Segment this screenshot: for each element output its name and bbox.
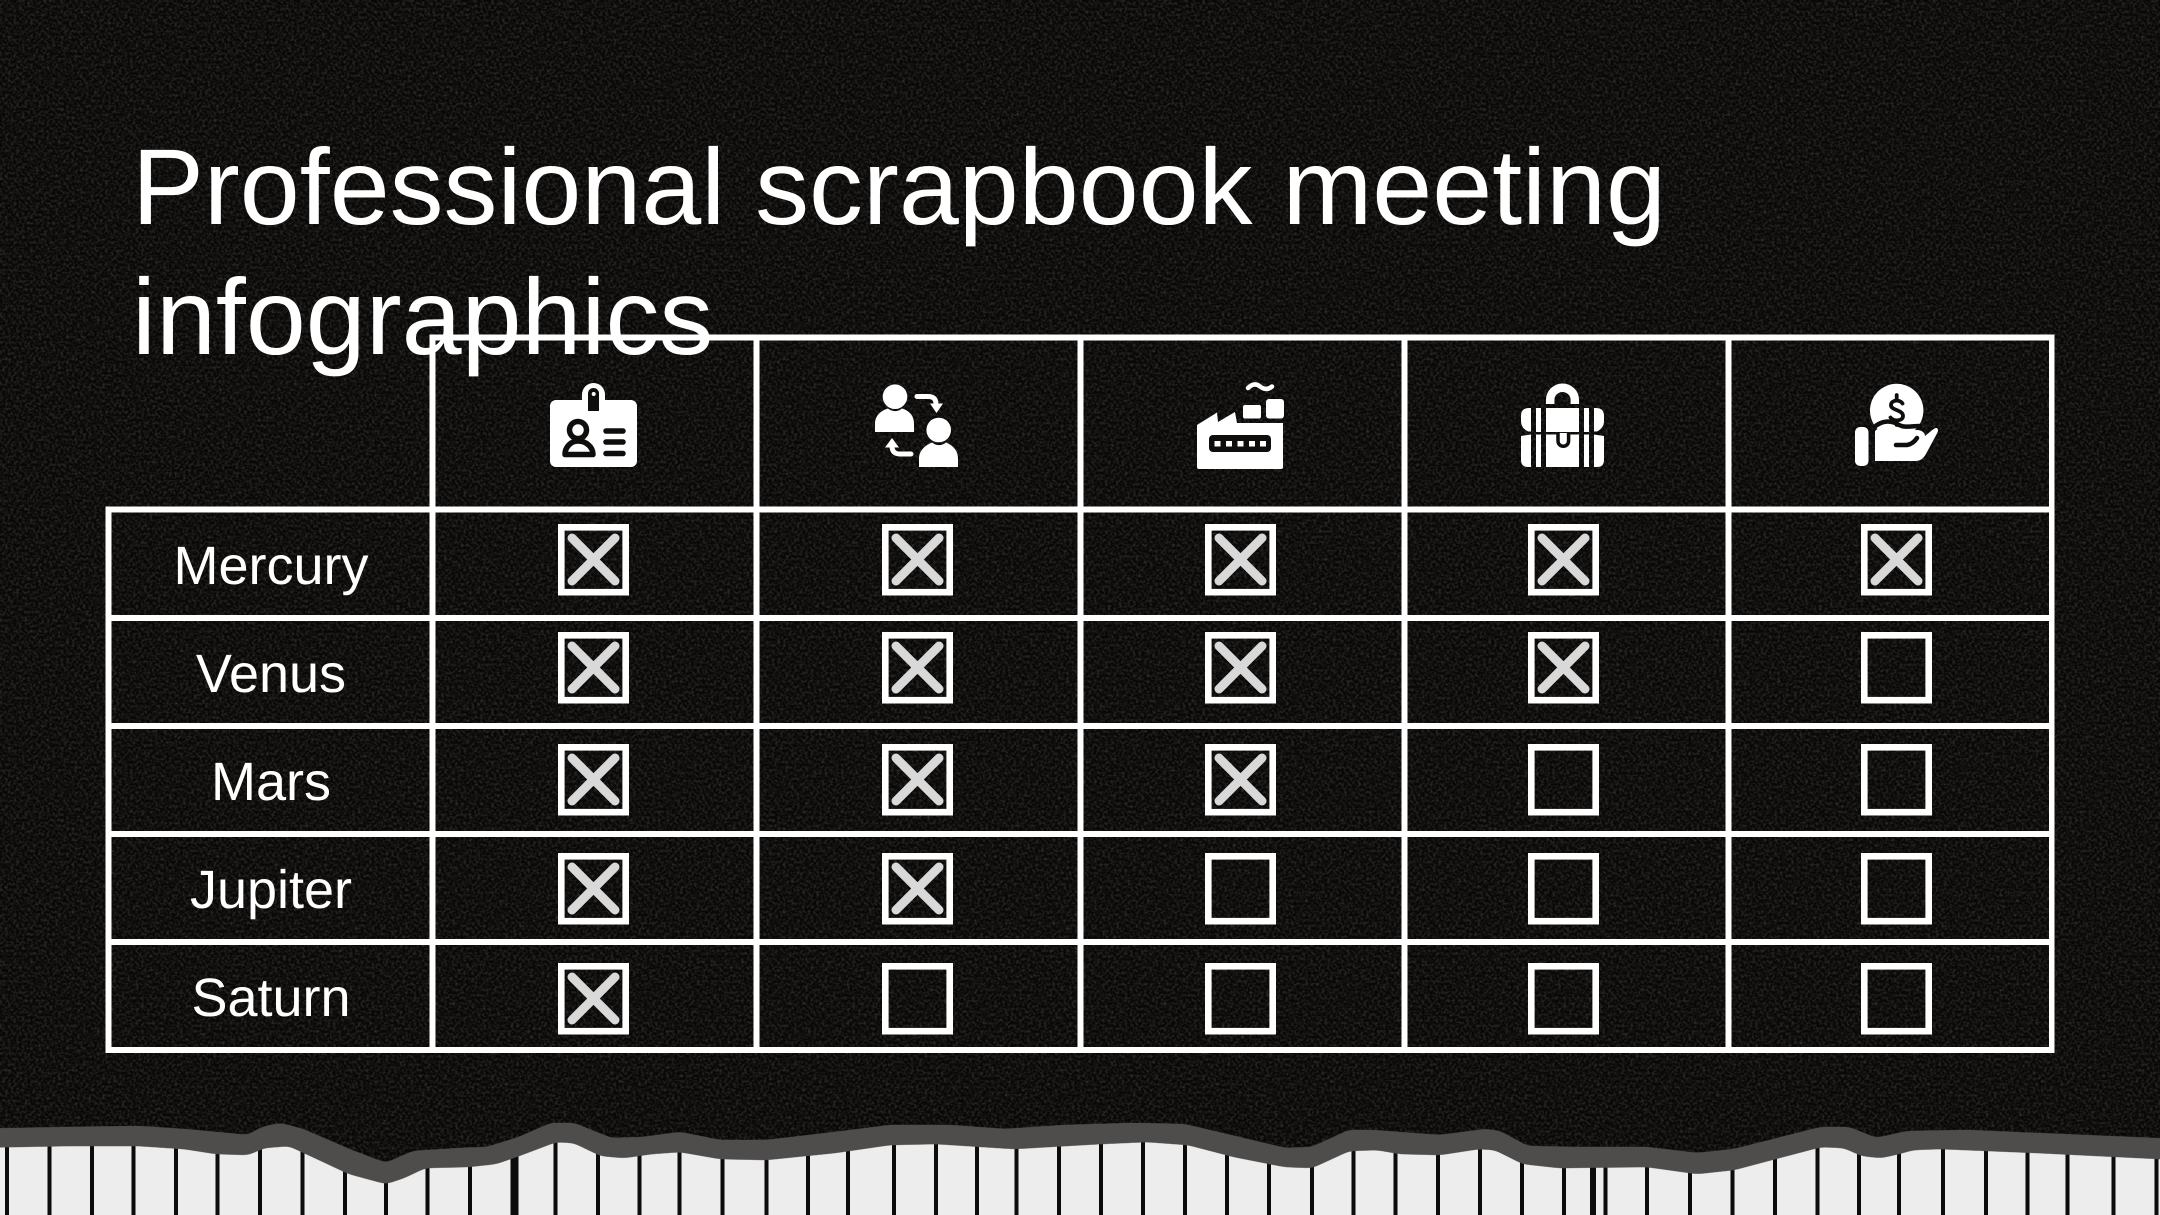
checkboxes: Mars row [561, 747, 1929, 812]
row label: Mars: Mars [211, 752, 331, 812]
paper [0, 1141, 2160, 1215]
paper ruled lines [5, 1135, 2158, 1215]
icon: people exchange [875, 384, 958, 467]
row label: Saturn: Saturn [191, 968, 351, 1028]
title: infographics [132, 256, 713, 377]
checkboxes: Saturn row [561, 966, 1929, 1031]
icon: id badge [550, 383, 637, 467]
checkboxes: Jupiter row [561, 856, 1929, 921]
title: Professional scrapbook meeting [132, 126, 1666, 247]
table grid [106, 334, 2054, 1053]
torn edge band [0, 1124, 2160, 1183]
checkboxes: Mercury row [561, 527, 1929, 592]
icon: factory [1197, 384, 1284, 469]
checkboxes: Venus row [561, 635, 1929, 700]
row label: Venus: Venus [196, 644, 346, 704]
icon: hand holding coin [1855, 384, 1938, 466]
comparison table [106, 334, 2054, 1053]
row label: Jupiter: Jupiter [190, 860, 352, 920]
torn paper strip [0, 1124, 2160, 1215]
row label: Mercury: Mercury [173, 536, 369, 596]
icon: briefcase [1521, 388, 1604, 467]
